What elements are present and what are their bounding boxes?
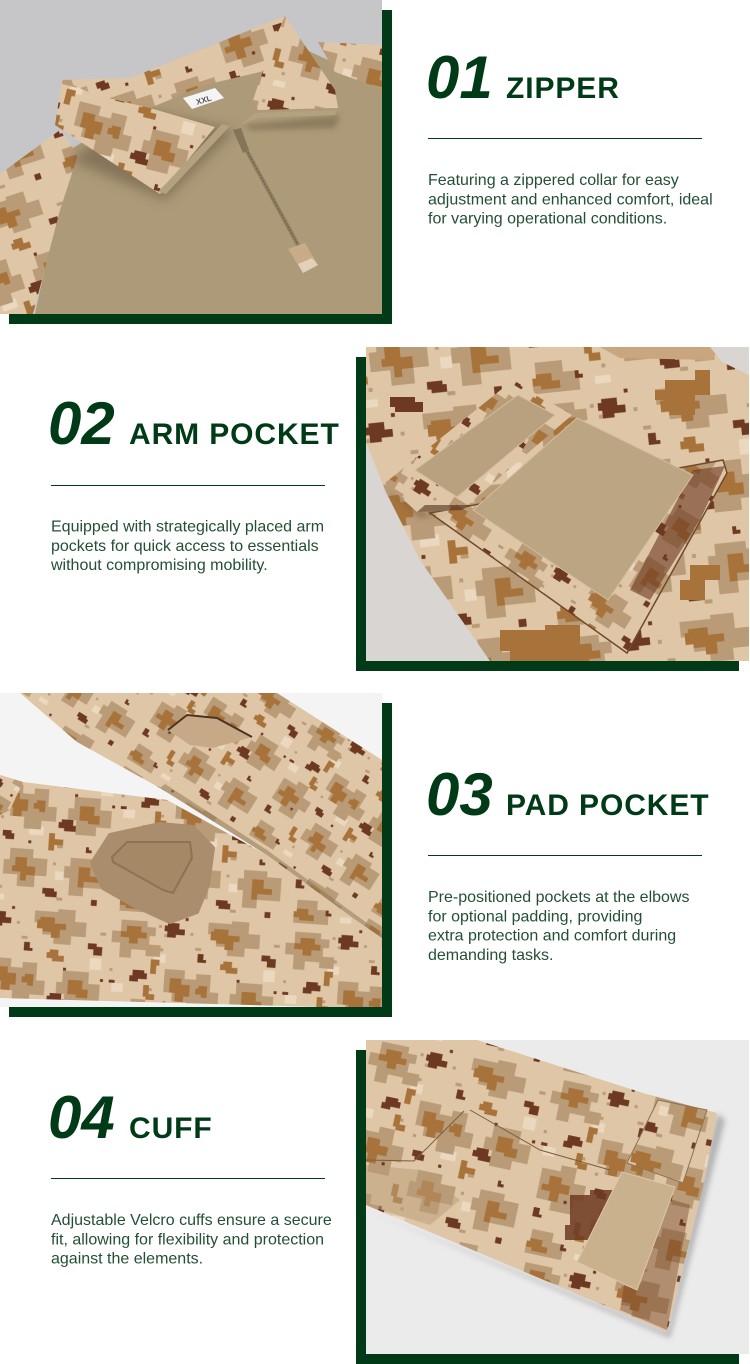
large velcro patch (473, 418, 693, 600)
panel: zipper section (0, 0, 717, 324)
size label: XXL (195, 94, 213, 107)
shirt body (35, 40, 382, 314)
pocket body (430, 460, 727, 653)
green frame: cuff photo (356, 1050, 739, 1364)
text block: cuff description: against the elements. (51, 1251, 203, 1268)
zipper (233, 128, 318, 273)
green frame: zipper photo (9, 10, 392, 324)
pocket opening (168, 715, 252, 748)
green frame: arm pocket photo (356, 357, 739, 671)
pocket flap (385, 380, 572, 512)
cuff velcro strip (577, 1172, 675, 1290)
photo: zippered collar (0, 0, 382, 314)
camo cuff fabric (366, 1040, 717, 1332)
text block: pad pocket description: extra protection and comfort during (428, 928, 676, 945)
section number: 03: 03 (426, 761, 493, 828)
panel: pad pocket section (0, 693, 709, 1017)
upper sleeve (20, 693, 382, 938)
text block: arm pocket description: without compromising mobility. (50, 557, 268, 574)
text block: cuff description: fit, allowing for flexibility and protection (51, 1231, 324, 1248)
text block: cuff description: Adjustable Velcro cuffs ensure a secure (51, 1212, 332, 1229)
heading: zipper: ZIPPER (506, 72, 620, 105)
right collar flap (253, 16, 338, 110)
lower sleeve (0, 775, 382, 1007)
text block: zipper description: adjustment and enhanced comfort, ideal (428, 191, 713, 208)
text block: arm pocket description: pockets for quick access to essentials (51, 538, 319, 555)
green frame: pad pocket photo (9, 703, 392, 1017)
panel: arm pocket section (48, 347, 749, 671)
section number: 04: 04 (48, 1084, 115, 1151)
size label (183, 88, 224, 109)
photo: arm pocket (366, 347, 749, 661)
photo: elbow pad pocket (0, 693, 382, 1007)
text block: zipper description: Featuring a zippered collar for easy (428, 172, 679, 189)
text block: pad pocket description: for optional padding, providing (428, 908, 642, 925)
elbow pad (92, 824, 213, 922)
camo sleeve fabric (366, 347, 749, 661)
text block: pad pocket description: Pre-positioned pockets at the elbows (428, 889, 689, 906)
text block: zipper description: for varying operational conditions. (428, 211, 667, 228)
photo: velcro cuff (366, 1040, 749, 1354)
section number: 02: 02 (48, 390, 115, 457)
camo collar back band (62, 16, 285, 110)
small velcro patch (415, 395, 555, 497)
heading: cuff: CUFF (129, 1112, 213, 1145)
panel: cuff section (48, 1040, 749, 1364)
text block: arm pocket description: Equipped with strategically placed arm (51, 518, 324, 536)
left collar flap (55, 80, 215, 194)
left camo sleeve (0, 130, 78, 314)
text block: pad pocket description: demanding tasks. (428, 947, 553, 964)
heading: arm pocket: ARM POCKET (129, 418, 340, 451)
cuff tab (627, 1100, 707, 1183)
section number: 01: 01 (426, 44, 493, 111)
heading: pad pocket: PAD POCKET (506, 789, 709, 822)
right camo shoulder (318, 42, 382, 89)
